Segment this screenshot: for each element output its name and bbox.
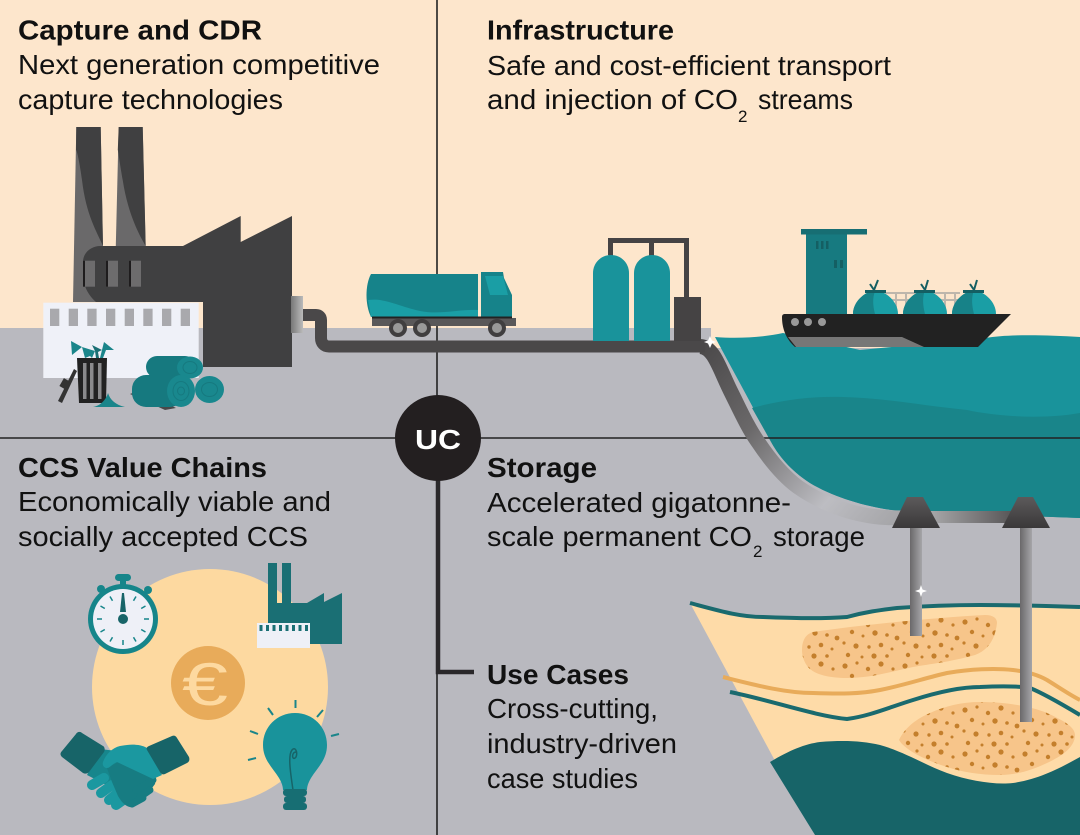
icon: ship: [782, 229, 1011, 347]
icon: factory: [73, 127, 292, 367]
text: Capture and CDR: Next generation competitive: [18, 49, 380, 80]
text: Capture and CDR: Capture and CDR: [18, 14, 262, 46]
icon: tanker truck: [366, 272, 516, 337]
sparkle: pipeline joint: [704, 336, 716, 348]
text: Storage: scale permanent CO: [487, 521, 752, 552]
capture pipe to truck and tanks: [291, 296, 705, 346]
icon: euro coin: €: [182, 651, 228, 718]
sparkle: well: [915, 585, 927, 597]
sea: [715, 333, 1080, 518]
geological layers: [690, 603, 1080, 835]
white annex building: [43, 303, 199, 378]
text: Use Cases: industry-driven: [487, 728, 677, 759]
UC hub with Use Cases connector: UC: [415, 424, 461, 455]
background: ground: [0, 328, 1080, 835]
injection wells: [892, 497, 1050, 722]
text: CCS Value Chains: socially accepted CCS: [18, 521, 308, 552]
icon: trash can with biomass waste: [58, 341, 125, 407]
text: Capture and CDR: capture technologies: [18, 84, 283, 115]
text: Storage: storage: [773, 521, 865, 552]
icon: stopwatch: [88, 574, 158, 654]
background: sky above sea: [711, 328, 1080, 348]
text: Storage: Accelerated gigatonne-: [487, 487, 791, 518]
icon: storage tanks with frame: [593, 238, 701, 341]
text: Infrastructure: 2: [738, 107, 747, 126]
icon: small factory: [257, 563, 342, 648]
UC hub with Use Cases connector: [395, 395, 481, 672]
well 2: [1002, 497, 1050, 722]
pipeline to storage: [700, 346, 1012, 518]
text: Infrastructure: [487, 14, 891, 126]
text: CCS Value Chains: CCS Value Chains: [18, 452, 267, 483]
icon: handshake: [60, 732, 189, 807]
icon: stacked logs: [130, 356, 224, 410]
text: Infrastructure: and injection of CO: [487, 84, 738, 115]
text: Storage: Storage: [487, 452, 597, 483]
value chain circle: [92, 569, 328, 805]
well 1: [892, 497, 940, 636]
text: Infrastructure: Infrastructure: [487, 14, 674, 46]
text: CCS Value Chains: [18, 452, 331, 552]
reservoir: lower: [899, 702, 1075, 775]
text: Storage: [487, 452, 865, 561]
text: Use Cases: [487, 659, 677, 794]
text: Use Cases: case studies: [487, 763, 638, 794]
icon: light bulb: [248, 700, 339, 810]
text: Use Cases: Cross-cutting,: [487, 693, 658, 724]
icon: euro coin: [171, 646, 245, 720]
text: Capture and CDR: [18, 14, 380, 115]
text: Infrastructure: Safe and cost-efficient transport: [487, 50, 891, 81]
text: Infrastructure: streams: [758, 84, 853, 115]
text: Use Cases: Use Cases: [487, 659, 629, 690]
background: sky: [0, 0, 1080, 328]
text: CCS Value Chains: Economically viable and: [18, 486, 331, 517]
text: Storage: 2: [753, 542, 762, 561]
reservoir: upper: [802, 615, 997, 678]
